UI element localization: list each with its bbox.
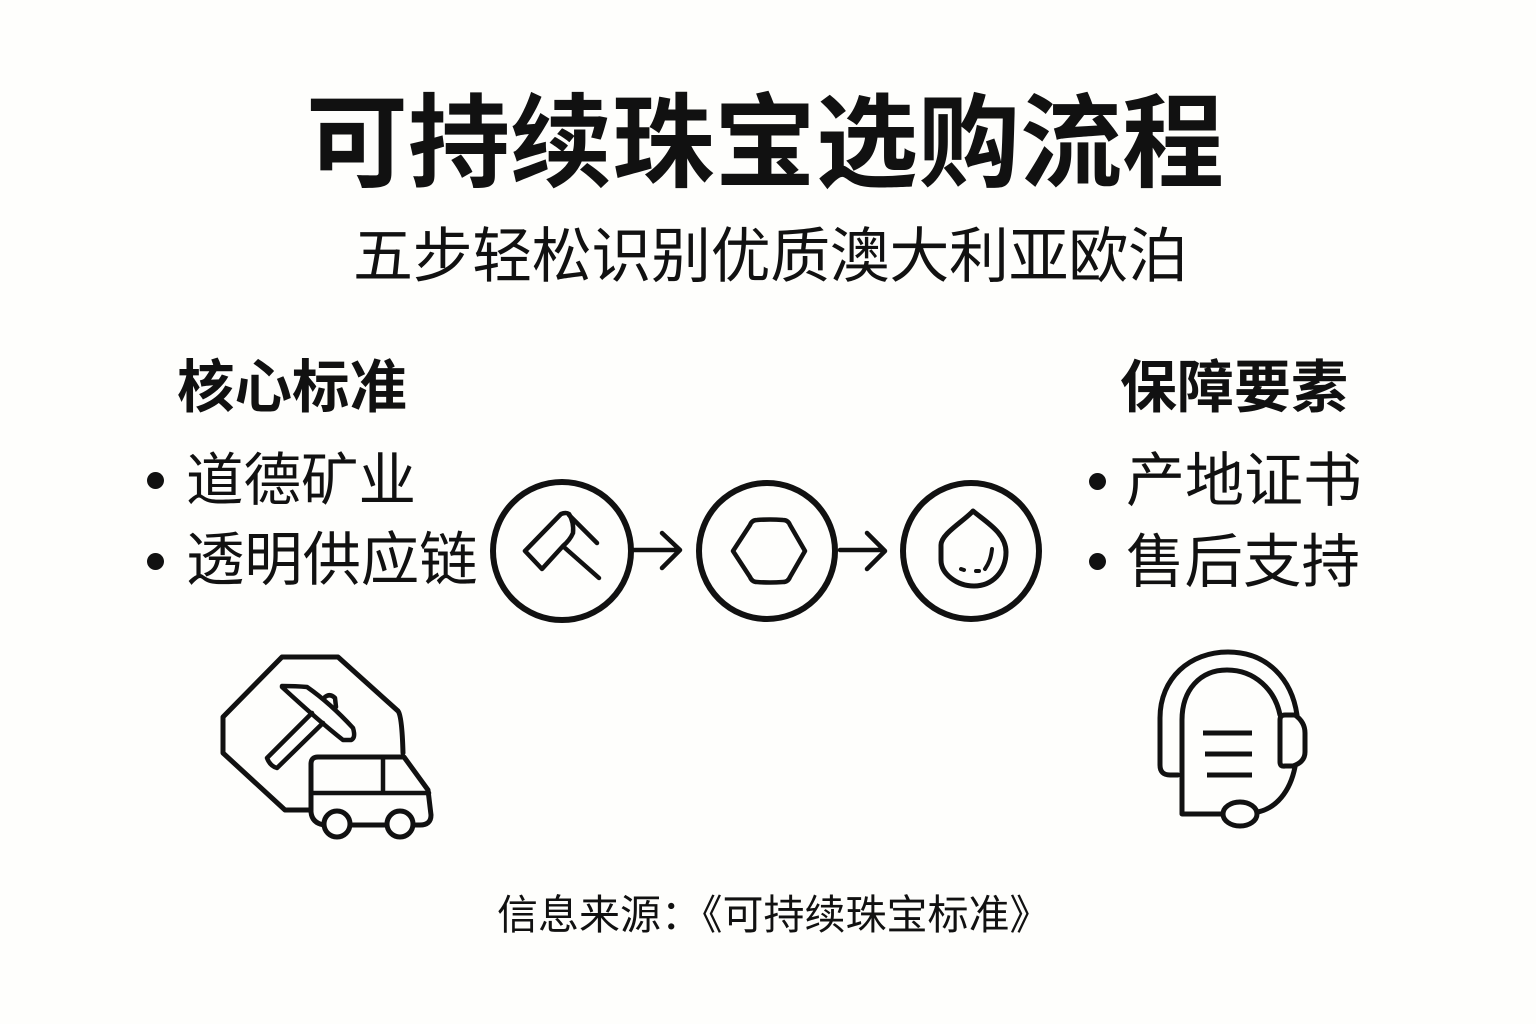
title: 可持续珠宝选购流程: [306, 87, 1224, 201]
left heading: 核心标准: [177, 356, 407, 420]
left panel: core standards: [147, 356, 478, 593]
right heading: 保障要素: [1120, 356, 1348, 420]
source note: 信息来源：《可持续珠宝标准》: [497, 892, 1050, 938]
left bullet list: [147, 449, 478, 593]
icon: pickaxe and truck: [223, 657, 431, 837]
subtitle: 五步轻松识别优质澳大利亚欧泊: [353, 223, 1187, 290]
arrow: step one to two: [634, 533, 680, 568]
right bullet list: 产地证书: [1126, 448, 1362, 514]
left bullet list: 道德矿业: [186, 449, 416, 513]
right bullet list: [1089, 448, 1362, 595]
icon: support headset document: [1160, 652, 1305, 826]
arrow: step two to three: [840, 533, 885, 569]
icon: hexagon gem step: [699, 483, 835, 619]
icon: hammer step: [493, 482, 631, 620]
right bullet list: 售后支持: [1126, 530, 1360, 595]
icon: opal drop step: [903, 483, 1039, 619]
right panel: purchase essentials: [1089, 356, 1362, 595]
left bullet list: 透明供应链: [186, 528, 478, 593]
